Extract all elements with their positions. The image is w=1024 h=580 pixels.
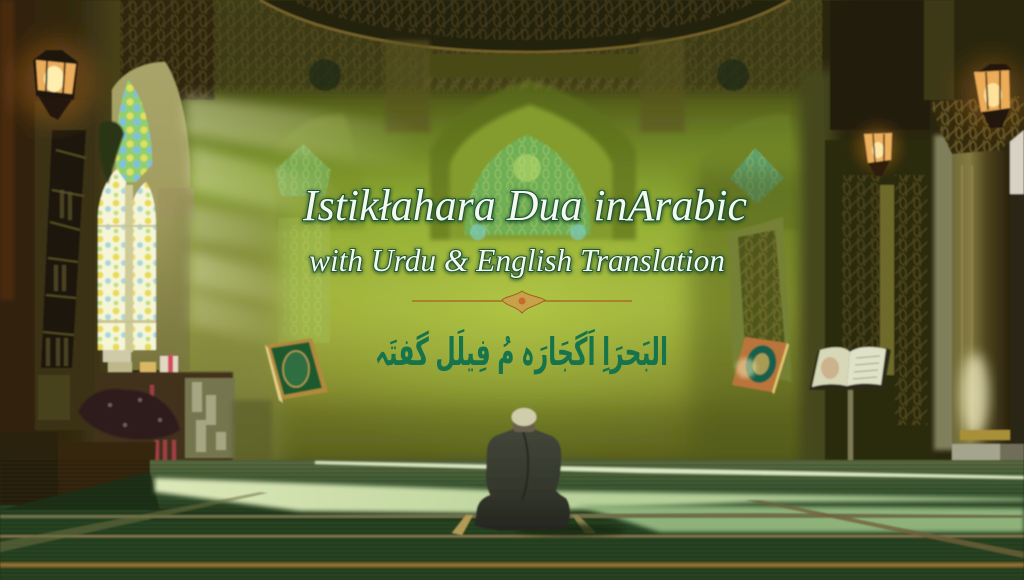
right wall lantern: [960, 60, 1024, 128]
left Quran book: [265, 338, 328, 403]
left bookcase: [35, 100, 95, 430]
carpet border stripes: [0, 492, 1024, 568]
lower wall shading: [160, 170, 860, 470]
right Quran book: [732, 337, 789, 394]
centre wall lantern: [856, 126, 900, 176]
left wall with arch recess: [0, 0, 280, 520]
right ornamental wall panel: [728, 217, 792, 382]
central stained medallion: [465, 135, 590, 240]
stained glass window: [98, 80, 156, 352]
potted plant: [0, 389, 180, 510]
praying man: [474, 408, 625, 536]
carpeted floor: [0, 460, 1024, 580]
Arabic calligraphy line: البَحرَاِ اَگجَارَہ مُ فِیلَل گفتَہ: [375, 329, 668, 375]
sunlight bands on floor: [155, 461, 1024, 532]
ornamental divider: [412, 291, 632, 313]
open book on lectern: [809, 347, 891, 470]
dome ceiling and upper frieze: [180, 0, 840, 132]
right column: [930, 96, 1024, 475]
wall arches: [275, 78, 800, 240]
desk with books: [98, 350, 272, 470]
left ornamental wall panel: [278, 218, 330, 343]
right dark wall panels: [800, 0, 1024, 470]
left wall lantern: [13, 40, 97, 124]
subtitle: with Urdu & English Translation: [309, 242, 725, 278]
right light opening: [1008, 118, 1024, 454]
hanging plant by window: [99, 121, 124, 184]
title: Istikłahara Dua inArabic: [302, 181, 747, 230]
side medallions: [275, 144, 784, 204]
light rays from window: [185, 95, 420, 345]
